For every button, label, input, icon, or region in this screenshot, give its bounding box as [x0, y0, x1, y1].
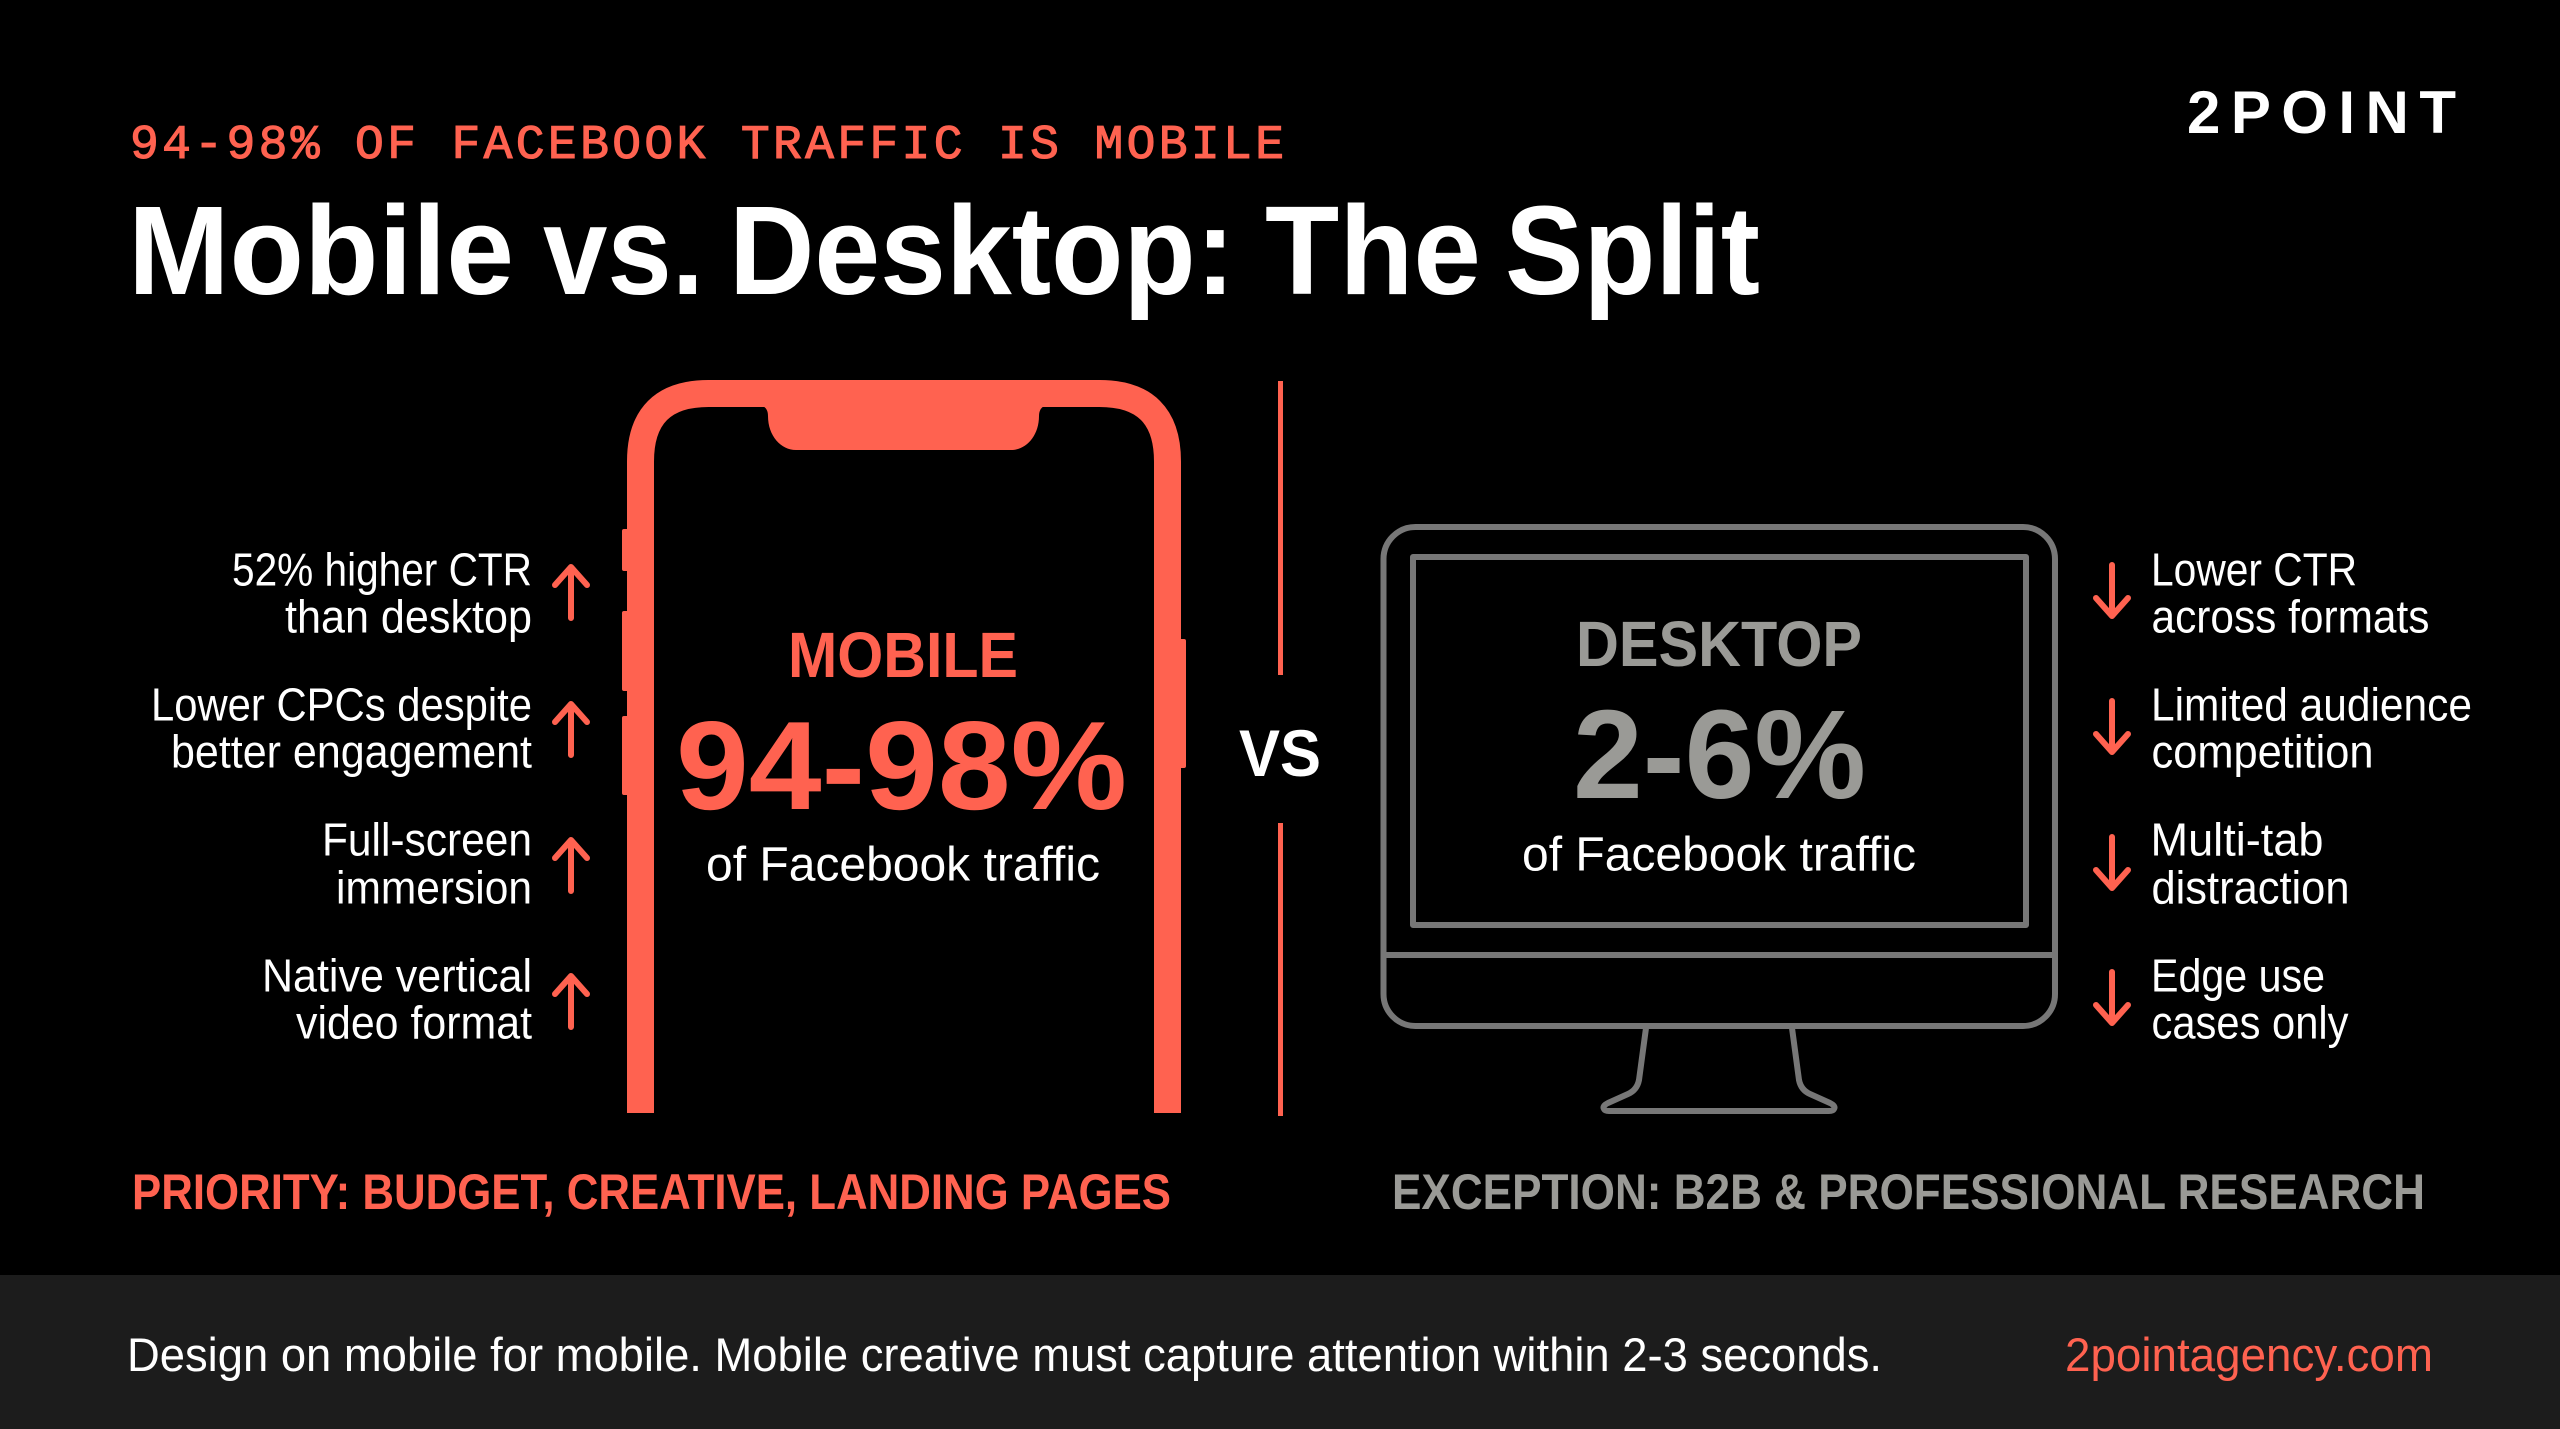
vs divider: [1239, 381, 1321, 1116]
benefit: native vertical: Native vertical: [262, 950, 532, 1002]
title: Split: [1505, 180, 1760, 321]
desktop caption: of Facebook traffic: [1522, 828, 1916, 882]
benefit: lower CPCs: Lower CPCs despite: [151, 678, 532, 730]
benefit: 52% higher CTR: than desktop: [285, 590, 532, 642]
drawback: lower CTR: Lower CTR: [2151, 544, 2357, 596]
mobile label: MOBILE: [788, 619, 1018, 691]
drawback: multi-tab: [2150, 814, 2350, 914]
icon: down arrow 2: [2096, 701, 2128, 752]
icon: down arrow 1: [2096, 565, 2128, 616]
mobile caption: of Facebook traffic: [706, 838, 1100, 892]
benefit: lower CPCs: better engagement: [171, 726, 532, 778]
eyebrow heading: 94-98% OF FACEBOOK TRAFFIC IS MOBILE: [130, 119, 1284, 173]
vs label: VS: [1239, 716, 1321, 790]
icon: down arrow 3: [2096, 837, 2128, 888]
drawback: limited audience: Limited audience: [2151, 678, 2472, 730]
title: vs.: [543, 180, 704, 321]
panel: desktop drawbacks list: [2096, 544, 2472, 1048]
mobile percentage: 94-98%: [676, 695, 1127, 836]
drawback: edge use: cases only: [2152, 996, 2348, 1048]
footer link: 2pointagency.com: [2065, 1328, 2433, 1381]
mobile stat block: [676, 619, 1127, 892]
benefit: lower CPCs: [151, 678, 532, 778]
drawback: lower CTR: across formats: [2152, 590, 2430, 642]
icon: up arrow 1: [555, 567, 587, 618]
drawback: multi-tab: distraction: [2152, 862, 2350, 914]
drawback: limited audience: competition: [2152, 726, 2374, 778]
desktop stat block: [1522, 608, 1916, 882]
icon: down arrow 4: [2096, 972, 2128, 1023]
benefit: native vertical: [262, 950, 532, 1048]
drawback: edge use: Edge use: [2151, 950, 2325, 1002]
benefit: 52% higher CTR: [232, 544, 532, 642]
exception callout: EXCEPTION: B2B & PROFESSIONAL RESEARCH: [1392, 1164, 2425, 1220]
icon: up arrow 3: [555, 840, 587, 891]
benefit: full-screen: immersion: [336, 862, 532, 914]
drawback: edge use: [2151, 950, 2348, 1048]
footer message: Design on mobile for mobile. Mobile creative must capture attention within 2-3 seconds.: [127, 1328, 1882, 1381]
desktop percentage: 2-6%: [1573, 684, 1866, 825]
benefit: native vertical: video format: [296, 996, 532, 1048]
title: The: [1265, 180, 1481, 321]
benefit: full-screen: [322, 814, 532, 914]
footer bar: [0, 1275, 2560, 1429]
desktop label: DESKTOP: [1576, 608, 1862, 680]
icon: desktop monitor: [1384, 527, 2055, 1111]
logo: 2POINT: [2187, 79, 2456, 146]
drawback: multi-tab: Multi-tab: [2150, 814, 2324, 866]
icon: phone outline: [622, 394, 1186, 1113]
title: [128, 180, 1760, 321]
benefit: 52% higher CTR: 52% higher CTR: [232, 544, 532, 596]
title: Mobile: [128, 180, 514, 321]
drawback: lower CTR: [2151, 544, 2430, 642]
icon: up arrow 2: [555, 704, 587, 755]
drawback: limited audience: [2151, 678, 2472, 778]
icon: up arrow 4: [555, 976, 587, 1027]
benefit: full-screen: Full-screen: [322, 814, 532, 866]
title: Desktop:: [729, 180, 1235, 321]
panel: mobile benefits list: [151, 544, 587, 1048]
priority callout: PRIORITY: BUDGET, CREATIVE, LANDING PAGES: [132, 1164, 1171, 1220]
